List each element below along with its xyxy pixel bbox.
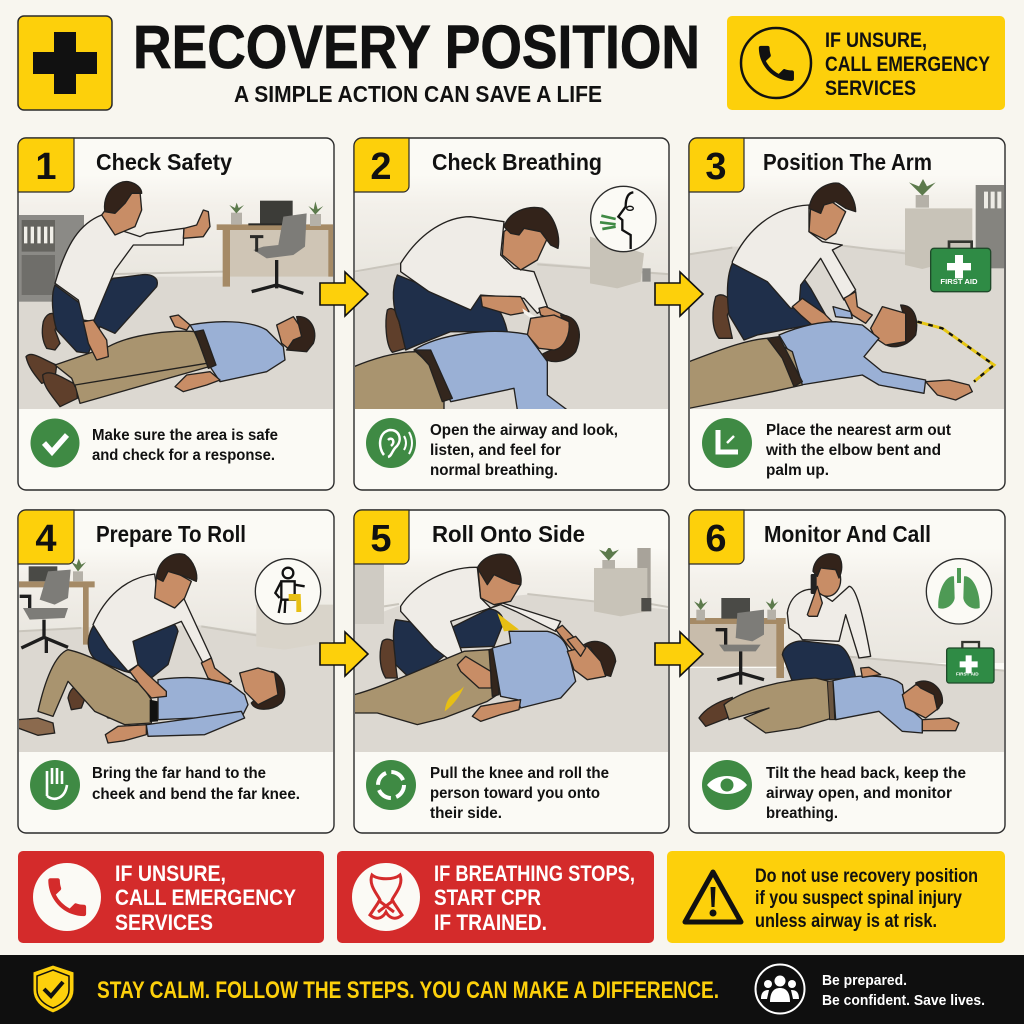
number badge 2 (354, 138, 409, 192)
panel: step 6 monitor and call (689, 510, 1005, 833)
first aid kit: FIRST AID (940, 277, 978, 286)
panel: step 4 prepare to roll (18, 510, 334, 833)
step 4 heading: Prepare To Roll (96, 521, 246, 547)
step 6 text: airway open, and monitor (766, 785, 952, 802)
number badge 5 (354, 510, 409, 564)
step 2 text: normal breathing. (430, 462, 558, 479)
panel: step 2 check breathing (354, 138, 670, 490)
icon: lungs (926, 559, 992, 624)
number badge 6: 6 (705, 518, 727, 560)
title: RECOVERY POSITION (133, 13, 700, 81)
callout: call emergency services: SERVICES (825, 77, 916, 100)
icon: check mark (30, 418, 80, 468)
panel: step 5 roll onto side (354, 510, 670, 833)
illustration: monitor and call scene (689, 548, 1005, 753)
number badge 1 (18, 138, 74, 192)
number badge 3 (689, 138, 744, 192)
callout: call emergency services: IF UNSURE, (825, 29, 927, 52)
number badge 6 (689, 510, 744, 564)
icon: bent arm (702, 418, 752, 468)
step 2 text: listen, and feel for (430, 442, 561, 459)
step 3 text (765, 422, 952, 479)
first aid kit (931, 242, 991, 292)
step 1 text: Make sure the area is safe (92, 427, 278, 444)
banner: start CPR: START CPR (434, 885, 541, 910)
step 3 text: palm up. (766, 462, 829, 479)
step 2 text (430, 422, 618, 479)
step 4 text (92, 765, 300, 803)
step 6 text (766, 765, 966, 822)
step 2 heading: Check Breathing (432, 149, 602, 175)
panel: step 1 check safety (18, 138, 334, 490)
banner: start CPR (337, 851, 654, 943)
step 6 heading: Monitor And Call (764, 521, 931, 547)
illustration: position the arm scene (689, 175, 1005, 410)
arrow 2 to 3 (655, 272, 703, 316)
banner: call emergency: CALL EMERGENCY (115, 885, 296, 910)
arrow 4 to 5 (320, 632, 368, 676)
footer tagline: Be confident. Save lives. (822, 992, 985, 1009)
step 5 heading: Roll Onto Side (432, 521, 585, 547)
banner: call emergency: IF UNSURE, (115, 861, 226, 886)
banner: call emergency (18, 851, 324, 943)
icon: people (756, 964, 804, 1014)
footer tagline: Be prepared. (822, 972, 907, 989)
number badge 4: 4 (35, 518, 57, 560)
icon: hand (30, 760, 80, 810)
step 3 text: with the elbow bent and (765, 442, 941, 459)
callout: call emergency services: CALL EMERGENCY (825, 53, 990, 76)
first aid kit (947, 642, 994, 683)
footer bar (0, 955, 1024, 1024)
step 1 text: and check for a response. (92, 447, 275, 464)
illustration: check breathing scene (354, 175, 670, 410)
step 1 text (92, 427, 278, 464)
first aid kit: FIRST AID (956, 672, 979, 677)
subtitle: A SIMPLE ACTION CAN SAVE A LIFE (234, 81, 602, 107)
footer slogan: STAY CALM. FOLLOW THE STEPS. YOU CAN MAKE A DIFFERENCE. (97, 977, 719, 1004)
step 5 text: their side. (430, 805, 502, 822)
banner: call emergency: SERVICES (115, 910, 213, 935)
header icon: first aid cross (18, 16, 112, 110)
banner: start CPR: IF BREATHING STOPS, (434, 861, 635, 886)
step 5 text: person toward you onto (430, 785, 600, 802)
illustration: roll onto side scene (354, 546, 670, 753)
icon: person bending knee (255, 559, 321, 624)
icon: rotate arrows (366, 760, 416, 810)
icon: ear (366, 418, 416, 468)
step 3 text: Place the nearest arm out (766, 422, 952, 439)
banner: spinal injury warning (667, 851, 1005, 943)
banner: start CPR: IF TRAINED. (434, 910, 547, 935)
banner: spinal injury warning: if you suspect spinal injury (755, 888, 962, 909)
panel: step 3 position the arm (689, 138, 1005, 490)
step 1 heading: Check Safety (96, 149, 232, 175)
number badge 1: 1 (35, 146, 57, 188)
step 4 text: Bring the far hand to the (92, 765, 266, 782)
illustration: prepare to roll scene (18, 548, 334, 753)
step 6 text: Tilt the head back, keep the (766, 765, 966, 782)
number badge 2: 2 (370, 146, 392, 188)
step 3 heading: Position The Arm (763, 149, 932, 175)
illustration: check safety scene (19, 175, 334, 410)
step 6 text: breathing. (766, 805, 838, 822)
icon: breath face (591, 186, 656, 252)
step 5 text: Pull the knee and roll the (430, 765, 609, 782)
banner: spinal injury warning: Do not use recovery position (755, 866, 978, 887)
number badge 5: 5 (370, 518, 392, 560)
step 4 text: cheek and bend the far knee. (92, 786, 300, 803)
number badge 4 (18, 510, 74, 564)
icon: shield (33, 965, 74, 1013)
step 2 text: Open the airway and look, (430, 422, 618, 439)
arrow 5 to 6 (655, 632, 703, 676)
footer tagline (822, 972, 985, 1009)
step 5 text (430, 765, 609, 822)
callout: call emergency services (727, 16, 1005, 110)
number badge 3: 3 (705, 146, 727, 188)
icon: eye (702, 760, 752, 810)
banner: spinal injury warning: unless airway is at risk. (755, 911, 937, 932)
arrow 1 to 2 (320, 272, 368, 316)
